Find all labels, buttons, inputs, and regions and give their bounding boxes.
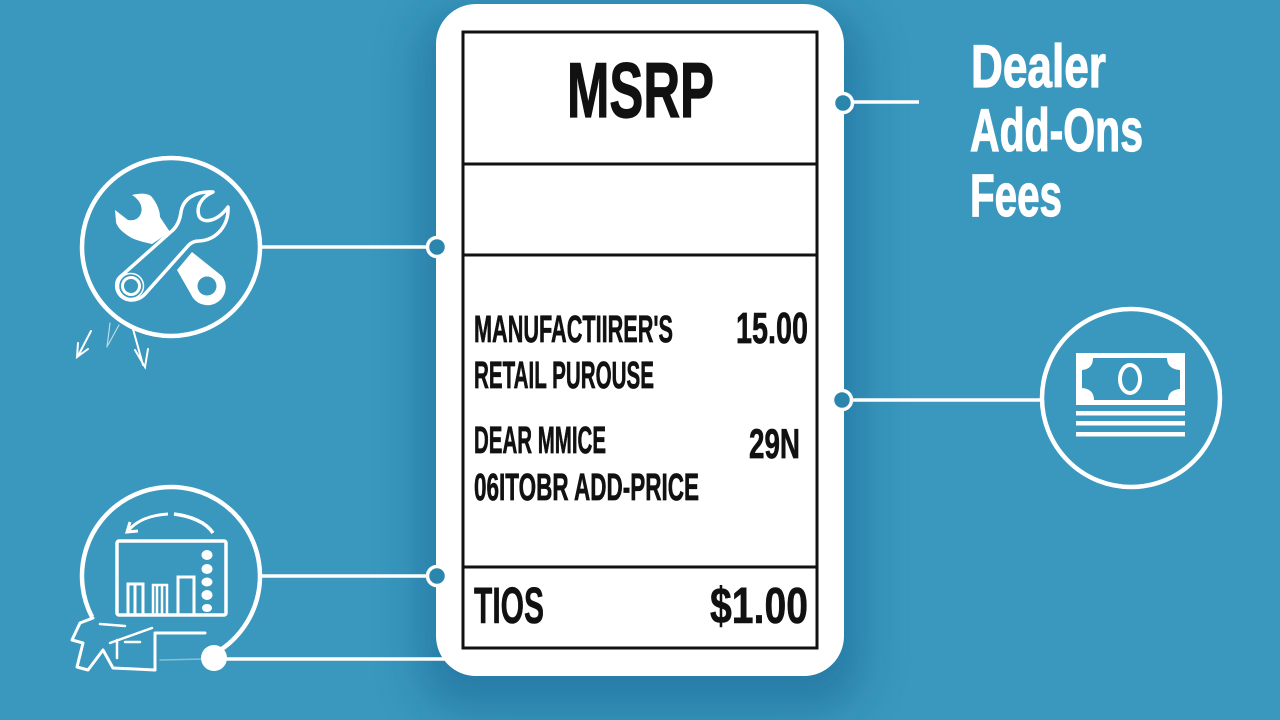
callout text: Add-Ons bbox=[970, 97, 1143, 164]
line item: manufacturer amount: 15.00 bbox=[736, 304, 808, 353]
line item: dealer label: 06ITOBR ADD-PRICE bbox=[474, 467, 699, 509]
connector dot: wrench bbox=[428, 238, 446, 256]
line item: manufacturer label: MANUFACTIIRER'S bbox=[474, 309, 673, 351]
connector line: bottom bbox=[214, 657, 448, 661]
connector line: dealer add-ons bbox=[853, 100, 919, 104]
connector line: wrench bbox=[260, 245, 428, 249]
heading: MSRP: MSRP bbox=[567, 46, 714, 134]
connector line: chart bbox=[260, 574, 428, 578]
connector dot: bottom white bbox=[201, 645, 227, 671]
connector dot: money bbox=[832, 390, 852, 410]
panel: dealer add-ons callout bbox=[834, 33, 1143, 229]
panel: chart icon and connectors bbox=[72, 487, 448, 671]
connector line: money bbox=[852, 398, 1042, 402]
panel: wrench icon and connector bbox=[77, 158, 428, 367]
icon: open chart circle bbox=[82, 487, 260, 650]
icon: sketched box bbox=[72, 618, 205, 670]
line item: manufacturer label bbox=[474, 309, 673, 397]
connector dot: dealer add-ons bbox=[834, 94, 852, 112]
panel: price sticker card bbox=[436, 4, 844, 676]
line item: dealer label: DEAR MMICE bbox=[474, 420, 606, 462]
panel: money icon and connector bbox=[832, 309, 1220, 487]
callout text bbox=[970, 33, 1143, 229]
line item: manufacturer label: RETAIL PUROUSE bbox=[474, 355, 654, 397]
icon: small scribbled arrows bbox=[77, 323, 148, 367]
line item: dealer amount: 29N bbox=[749, 420, 800, 467]
callout text: Dealer bbox=[971, 33, 1106, 100]
icon: banknote stack bbox=[1076, 353, 1185, 436]
callout text: Fees bbox=[970, 162, 1062, 229]
line item: dealer label bbox=[474, 420, 699, 509]
total label: TIOS bbox=[474, 577, 544, 634]
sticker frame bbox=[463, 32, 817, 648]
icon: dashboard chart bbox=[117, 514, 226, 615]
total amount: $1.00 bbox=[710, 577, 808, 634]
card background bbox=[436, 4, 844, 676]
connector dot: chart bbox=[428, 566, 446, 586]
icon: money circle bbox=[1042, 309, 1220, 487]
icon: wrench circle bbox=[82, 158, 260, 336]
